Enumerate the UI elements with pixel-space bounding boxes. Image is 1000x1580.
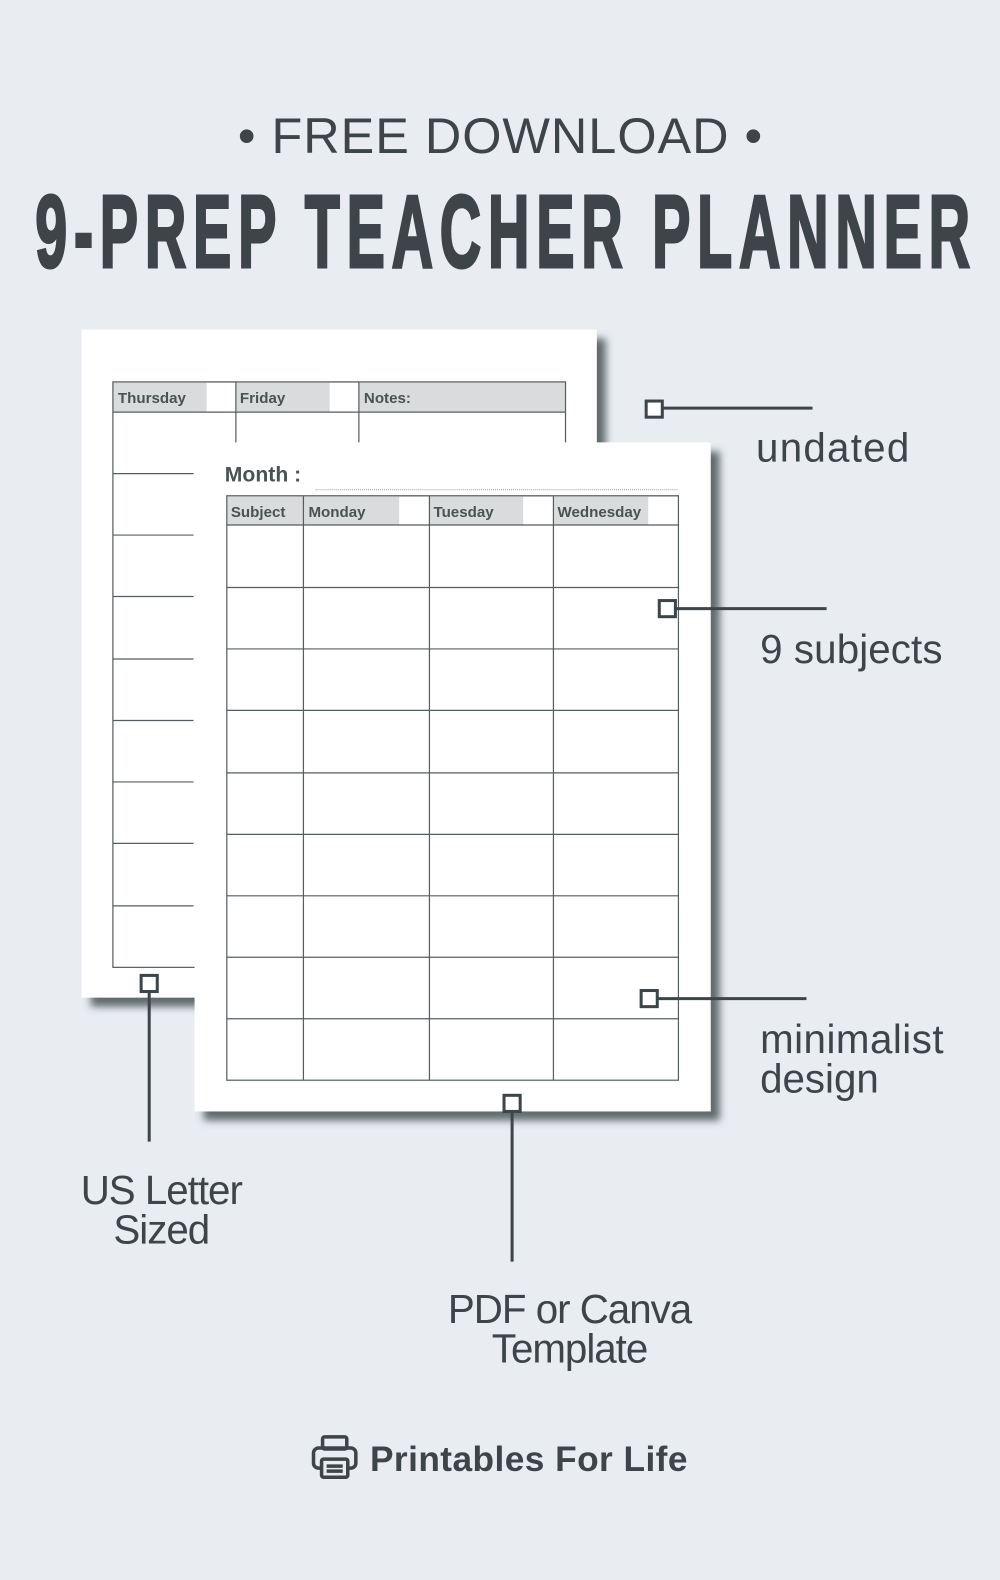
- back page: [82, 330, 597, 998]
- back page: Thursday: [118, 390, 187, 407]
- front page: Subject: [231, 504, 285, 521]
- callout: US Letter Sized: Sized: [113, 1207, 209, 1252]
- callout: US Letter Sized: [81, 975, 242, 1252]
- callout: PDF or Canva Template: Template: [492, 1326, 647, 1371]
- icon: printer: [314, 1437, 356, 1477]
- month label: Month :: [225, 464, 301, 487]
- callout: 9 subjects: 9 subjects: [760, 627, 943, 672]
- callout: PDF or Canva Template: [448, 1095, 693, 1371]
- front page: [195, 442, 711, 1111]
- callout: 9 subjects: [659, 601, 943, 672]
- callout: PDF or Canva Template: PDF or Canva: [448, 1287, 693, 1332]
- back page: Notes:: [364, 390, 411, 407]
- footer brand: Printables For Life: [370, 1440, 687, 1479]
- callout: minimalist design: design: [760, 1056, 879, 1101]
- callout: minimalist design: [641, 991, 944, 1101]
- front page: Wednesday: [557, 504, 642, 521]
- callout: minimalist design: minimalist: [760, 1017, 944, 1062]
- front page: Monday: [308, 504, 366, 521]
- callout: US Letter Sized: US Letter: [81, 1168, 242, 1213]
- back page: Friday: [240, 390, 286, 407]
- callout: undated: [646, 401, 909, 471]
- callout: undated: undated: [756, 426, 909, 471]
- subtitle: • FREE DOWNLOAD •: [238, 107, 762, 164]
- front page: Tuesday: [433, 504, 494, 521]
